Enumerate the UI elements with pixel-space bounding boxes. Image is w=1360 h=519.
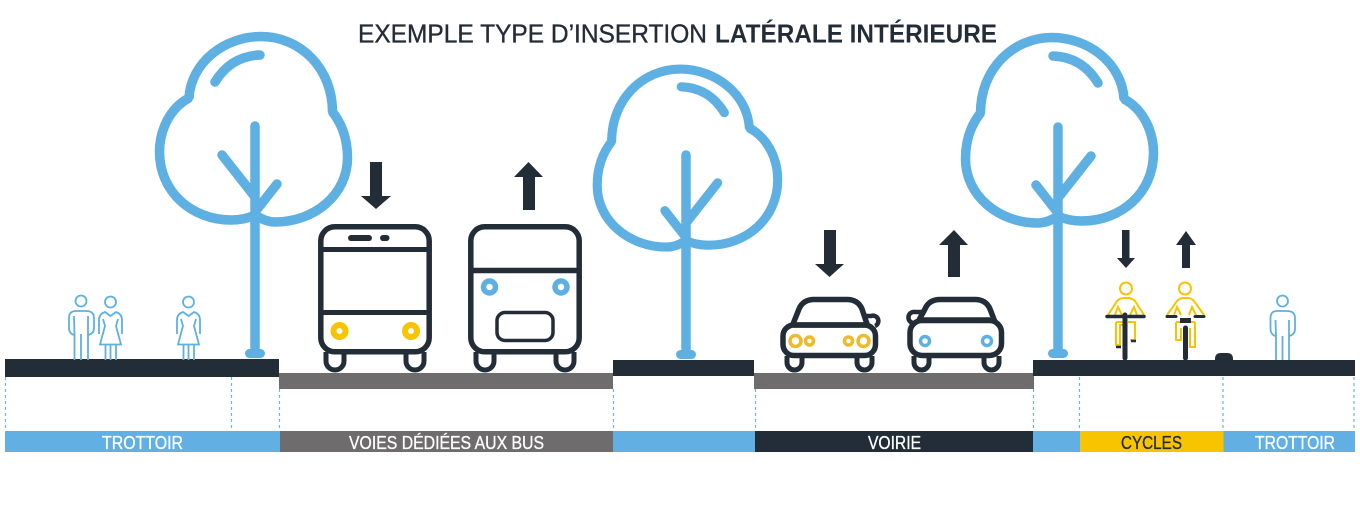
car rear (908, 300, 1002, 370)
pedestrian: woman (99, 296, 122, 360)
tree centre (597, 69, 778, 359)
label bar: voirie: VOIRIE (868, 433, 921, 453)
pedestrian: woman right (177, 296, 200, 360)
label bar: right blue (1033, 431, 1080, 452)
title (358, 18, 997, 48)
tree left (160, 36, 348, 358)
bus rear (471, 227, 579, 370)
title: LATÉRALE INTÉRIEURE (715, 18, 997, 48)
cyclist going up (1167, 282, 1204, 358)
pedestrian: man right (1270, 296, 1295, 360)
ground profile (5, 353, 1355, 389)
label bar: voies dédiées aux bus (280, 431, 613, 453)
tree right (966, 38, 1154, 358)
car front (783, 300, 878, 370)
label bar: trottoir left: TROTTOIR (102, 433, 183, 453)
arrow: bus down (361, 162, 391, 209)
arrow: bus up (514, 162, 543, 210)
cyclist going down (1107, 282, 1144, 358)
label bar: trottoir right (1224, 431, 1355, 453)
bus front (321, 227, 429, 370)
label bar: centre blue (613, 431, 755, 452)
arrow: cycle down (1117, 230, 1135, 268)
arrow: car up (939, 230, 968, 277)
label bar: voies dédiées aux bus: VOIES DÉDIÉES AUX BUS (349, 433, 544, 453)
arrow: cycle up (1176, 231, 1196, 268)
label bar: cycles (1080, 431, 1224, 453)
label bar: trottoir left (5, 431, 280, 453)
title: EXEMPLE TYPE D’INSERTION (358, 18, 707, 48)
pedestrian: man left (69, 296, 94, 360)
label bar: trottoir right: TROTTOIR (1255, 433, 1335, 453)
label bar: cycles: CYCLES (1121, 433, 1182, 453)
label bar: voirie (755, 431, 1033, 453)
arrow: car down (815, 230, 844, 277)
